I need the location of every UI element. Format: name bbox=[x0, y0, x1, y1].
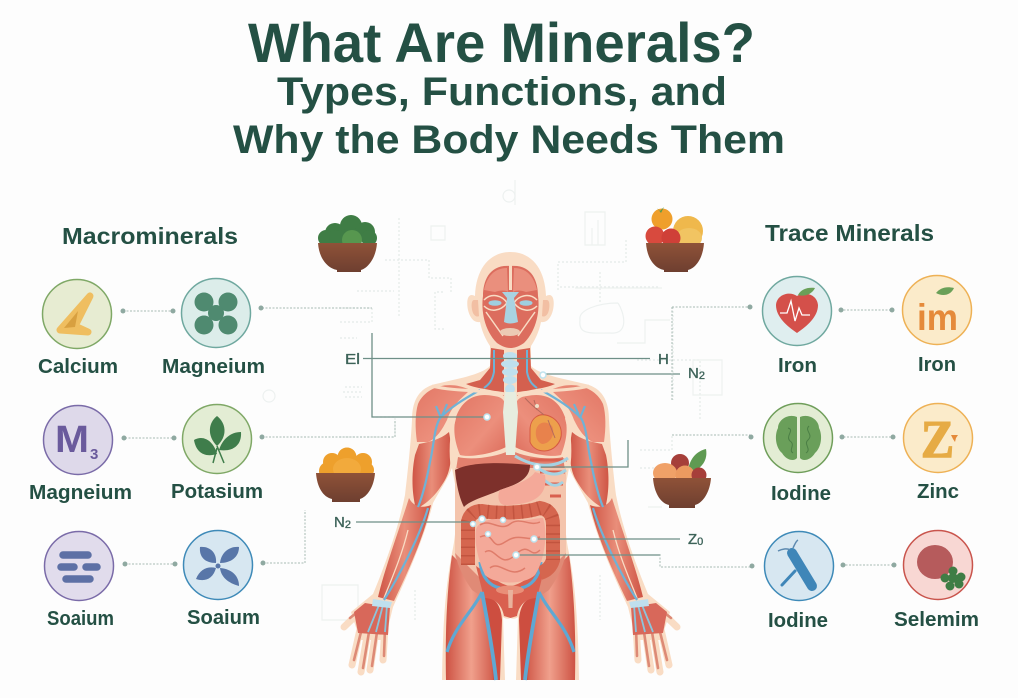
callout labels: H bbox=[658, 351, 669, 368]
mineral: Soaium bars bbox=[44, 532, 114, 630]
mineral: Zinc: Zinc bbox=[917, 481, 959, 503]
mineral: Iodine brain bbox=[764, 404, 832, 505]
marker dots and leader lines bbox=[356, 333, 752, 567]
heading: Macrominerals: Macrominerals bbox=[62, 223, 238, 249]
mirrored right half bbox=[510, 252, 677, 680]
deltoid bbox=[416, 385, 470, 442]
leg vessels bbox=[447, 592, 482, 652]
stomach bbox=[498, 472, 545, 505]
bowl: fruit bbox=[646, 207, 704, 272]
mineral: Iron heart apple bbox=[762, 276, 832, 377]
callout labels: Z bbox=[688, 531, 697, 548]
spine and neck vertebrae bbox=[501, 352, 519, 455]
left half of body, mirrored for right bbox=[344, 252, 510, 680]
mineral: Selemim: Selemim bbox=[894, 609, 979, 631]
mineral: Iron im: Iron bbox=[918, 354, 956, 376]
mineral: Iodine brain: Iodine bbox=[771, 483, 831, 505]
ear bbox=[472, 300, 479, 317]
ribs bbox=[515, 456, 568, 496]
faint circuit background bbox=[263, 180, 722, 620]
mineral: Zinc: Z bbox=[921, 411, 954, 469]
bowl: berries bbox=[653, 449, 711, 508]
mineral: Iodine tube: Iodine bbox=[768, 610, 828, 632]
mineral: Potasium: Potasium bbox=[171, 481, 263, 503]
forearm bbox=[378, 498, 431, 601]
title bbox=[233, 11, 785, 162]
thigh outer bbox=[446, 555, 497, 680]
pectoral bbox=[454, 395, 506, 456]
mineral: Magneium M3: Magneium bbox=[29, 482, 132, 504]
mineral: Magneium: Magneium bbox=[162, 356, 265, 378]
mineral: Calcium bbox=[38, 280, 118, 378]
liver bbox=[455, 463, 530, 507]
large intestine bbox=[468, 508, 553, 573]
arm vessels bbox=[384, 390, 480, 600]
mineral: Magneium M3: 3 bbox=[90, 446, 98, 463]
callout labels bbox=[334, 351, 705, 548]
face bbox=[482, 266, 510, 348]
upper arm bbox=[412, 432, 451, 509]
mineral: Potasium bbox=[171, 404, 263, 503]
mineral: Magneium bbox=[162, 278, 265, 378]
neck muscle bbox=[466, 348, 504, 396]
mineral: Calcium: Calcium bbox=[38, 356, 118, 378]
mineral: Soaium leaves: Soaium bbox=[187, 607, 260, 629]
bowl: greens bbox=[318, 215, 377, 272]
mineral: Magneium M3 bbox=[29, 406, 132, 504]
callout labels: 2 bbox=[699, 370, 705, 382]
callout labels: N bbox=[688, 365, 699, 382]
heading: Trace Minerals: Trace Minerals bbox=[765, 220, 934, 246]
mineral: Iodine tube bbox=[764, 532, 834, 632]
thigh inner bbox=[483, 598, 502, 680]
heart on chest bbox=[525, 398, 561, 451]
mineral: Iron im: im bbox=[917, 297, 958, 338]
bowl: oranges bbox=[316, 448, 375, 502]
title: Types, Functions, and bbox=[277, 70, 727, 114]
mineral: Selemim bbox=[894, 530, 979, 631]
abdominal base bbox=[455, 468, 510, 600]
connectors bbox=[120, 304, 896, 568]
human body anatomy figure bbox=[344, 252, 752, 680]
mineral: Zinc bbox=[904, 404, 972, 503]
face centre: nose and mouth bbox=[500, 265, 520, 336]
hip muscle bbox=[455, 553, 484, 598]
callout labels: El bbox=[345, 351, 360, 368]
callout labels: 0 bbox=[697, 536, 703, 548]
pelvis bbox=[496, 586, 524, 608]
mineral: Soaium leaves bbox=[184, 530, 260, 629]
small intestine bbox=[475, 518, 545, 582]
mineral: Iron heart apple: Iron bbox=[778, 355, 817, 377]
title: What Are Minerals? bbox=[248, 11, 755, 74]
mineral: Soaium bars: Soaium bbox=[47, 608, 114, 630]
mineral: Magneium M3: M bbox=[55, 419, 89, 461]
lower chest bbox=[456, 450, 510, 470]
callout labels: 2 bbox=[345, 519, 351, 531]
mineral: Iron im bbox=[902, 276, 972, 376]
title: Why the Body Needs Them bbox=[233, 118, 785, 162]
callout labels: N bbox=[334, 514, 345, 531]
